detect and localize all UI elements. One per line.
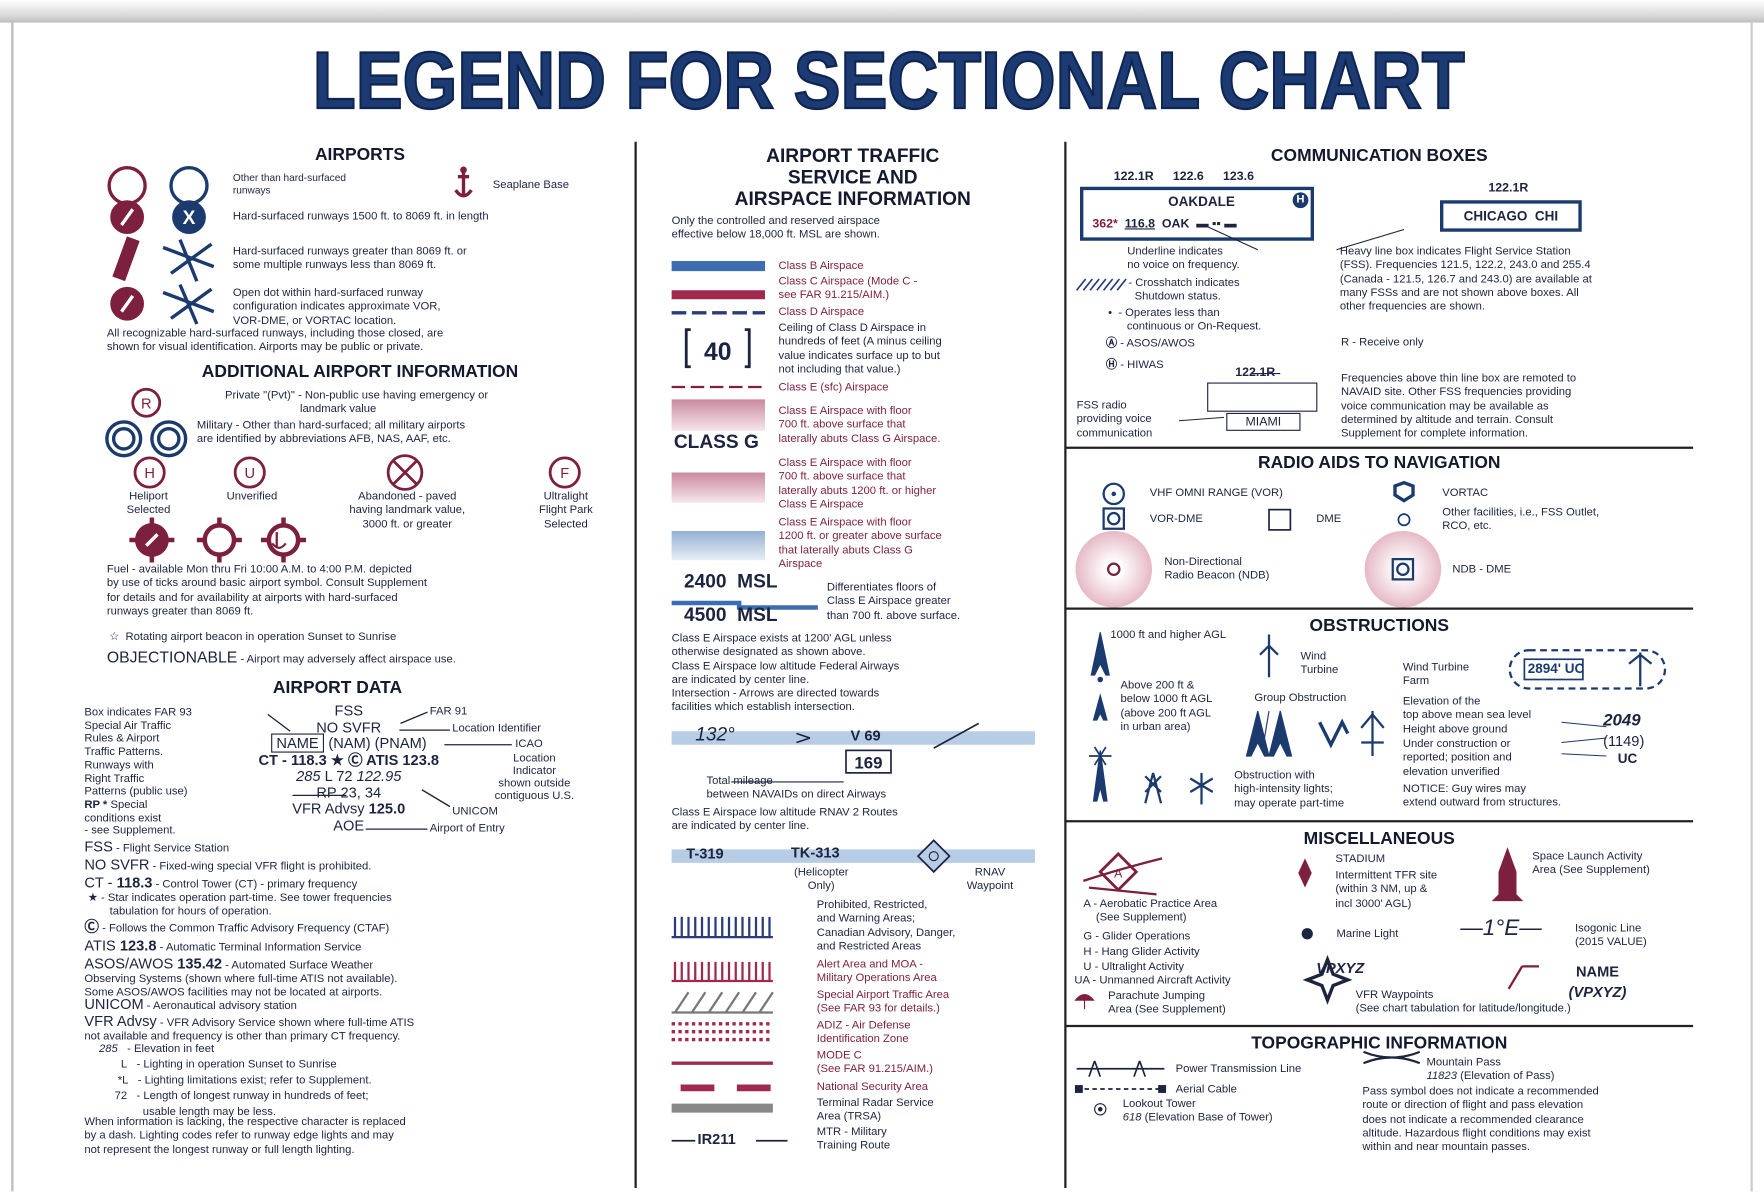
panel: miscellaneous: incl 3000' AGL)	[1335, 897, 1411, 910]
panel: airports: Heliport	[129, 490, 168, 503]
panel: airport traffic service and airspace information: Ceiling of Class D Airspace in	[778, 322, 926, 334]
panel: airport traffic service and airspace information: value indicates surface up to but	[778, 349, 940, 362]
panel: airports: All recognizable hard-surfaced runways, including those closed, are	[107, 327, 443, 340]
panel: airports: runways greater than 8069 ft.	[107, 605, 253, 618]
panel: obstructions: in urban area)	[1120, 721, 1191, 733]
panel: airport data: Location Identifier	[452, 722, 541, 735]
panel: airport traffic service and airspace information: Class E Airspace with floor	[778, 457, 912, 469]
panel: miscellaneous: (VPXYZ)	[1569, 983, 1626, 1000]
panel: communication boxes: many FSSs and are not shown above boxes. All	[1340, 287, 1579, 299]
panel: communication boxes: - Crosshatch indicates	[1128, 277, 1240, 289]
panel: airport traffic service and airspace information	[672, 145, 1035, 1152]
heading: miscellaneous: MISCELLANEOUS	[1304, 829, 1455, 848]
panel: miscellaneous: Isogonic Line	[1575, 922, 1641, 935]
comm box: oakdale	[1080, 187, 1314, 241]
panel: airport data: 72 - Length of longest runway in hundreds of feet;	[115, 1090, 369, 1102]
airport data definitions: FSS - Flight Service Station	[84, 838, 229, 855]
panel: communication boxes: Shutdown status.	[1135, 291, 1221, 303]
panel: airport data: not available and frequency is other than primary CT frequency.	[84, 1030, 400, 1043]
panel: airport traffic service and airspace information: 700 ft. above surface that	[778, 419, 905, 431]
panel: topographic information: Pass symbol does not indicate a recommended	[1362, 1086, 1599, 1098]
panel: airport traffic service and airspace information: (See FAR 93 for details.)	[817, 1003, 940, 1015]
panel: airport traffic service and airspace information: Total mileage	[706, 775, 773, 788]
panel: airport traffic service and airspace information: Class E Airspace with floor	[778, 405, 912, 417]
panel: airport data: Location	[513, 753, 556, 765]
panel: airport data: UNICOM	[452, 806, 498, 818]
panel: airport data: *L - Lighting limitations exist; refer to Supplement.	[118, 1074, 372, 1087]
panel: airport traffic service and airspace information: laterally abuts Class G Airspace.	[778, 433, 940, 445]
airspace symbols	[672, 261, 1035, 1142]
panel: communication boxes: 122.1R 122.6 123.6	[1114, 170, 1254, 183]
panel: airports: Hard-surfaced runways 1500 ft. to 8069 ft. in length	[233, 210, 489, 223]
panel: airports: Private "(Pvt)" - Non-public use having emergency or	[225, 389, 488, 402]
panel: communication boxes: 122.1R	[1488, 181, 1528, 195]
panel: airport data: not represent the longest runway or full length lighting.	[84, 1144, 355, 1156]
heading: airports: AIRPORTS	[315, 145, 405, 164]
panel: obstructions: Turbine	[1300, 664, 1338, 676]
panel: airport traffic service and airspace information: Waypoint	[967, 880, 1013, 892]
panel: airport traffic service and airspace information: Terminal Radar Service	[817, 1097, 934, 1109]
panel: airport data: FAR 91	[430, 705, 467, 718]
panel: airport traffic service and airspace information: Only the controlled and reserved airspace	[672, 215, 880, 227]
airport data definitions	[84, 838, 371, 891]
panel: airport data: L - Lighting in operation Sunset to Sunrise	[121, 1059, 337, 1071]
panel: airport data: Patterns (public use)	[84, 785, 188, 798]
panel: miscellaneous: Area (See Supplement)	[1108, 1004, 1226, 1016]
panel: airport traffic service and airspace information: Class C Airspace (Mode C -	[778, 276, 917, 288]
panel: miscellaneous: (See chart tabulation for latitude/longitude.)	[1356, 1003, 1571, 1015]
airport data sample block	[258, 702, 439, 833]
panel: airport data: UNICOM - Aeronautical advisory station	[84, 996, 297, 1012]
panel: topographic information: Power Transmission Line	[1176, 1063, 1301, 1076]
panel: topographic information: Mountain Pass	[1426, 1056, 1501, 1069]
panel: airport traffic service and airspace information: 2400 MSL	[684, 570, 778, 592]
panel: miscellaneous: (See Supplement)	[1096, 912, 1187, 924]
panel: airports: Fuel - available Mon thru Fri 10:00 A.M. to 4:00 P.M. depicted	[107, 564, 412, 576]
panel: airport traffic service and airspace information: Class E Airspace	[778, 498, 864, 511]
panel: communication boxes: 122.1R	[1235, 366, 1275, 379]
panel: topographic information: route or direction of flight and pass elevation	[1362, 1099, 1583, 1112]
panel: miscellaneous: Intermittent TFR site	[1335, 870, 1437, 882]
panel: airport data: Some ASOS/AWOS facilities may not be located at airports.	[84, 987, 382, 999]
panel: airport data: Rules & Airport	[84, 733, 159, 745]
panel: airport data: - see Supplement.	[84, 825, 176, 837]
panel: airport traffic service and airspace information: Class B Airspace	[778, 260, 864, 272]
panel: miscellaneous: Area (See Supplement)	[1532, 864, 1650, 877]
panel: topographic information: altitude. Hazardous flight conditions may exist	[1362, 1127, 1591, 1140]
panel: obstructions: elevation unverified	[1403, 766, 1500, 778]
panel: airports: OBJECTIONABLE - Airport may adversely affect airspace use.	[107, 648, 456, 666]
panel: airport traffic service and airspace information: Canadian Advisory, Danger,	[817, 927, 955, 939]
panel: airport traffic service and airspace information: (Helicopter	[794, 866, 848, 879]
airport symbol descriptions: Other than hard-surfaced	[233, 172, 346, 183]
panel: airports: Military - Other than hard-surfaced; all military airports	[197, 420, 465, 432]
obstruction icons	[1089, 632, 1666, 804]
panel: communication boxes: NAVAID site. Other FSS frequencies providing	[1341, 386, 1571, 399]
panel: airport data: conditions exist	[84, 812, 161, 824]
airport symbols	[105, 166, 581, 562]
airspace symbols: 169	[854, 753, 883, 772]
panel: miscellaneous: VFR Waypoints	[1356, 989, 1433, 1001]
panel: airport traffic service and airspace information: RNAV	[975, 866, 1005, 879]
panel: miscellaneous: G - Glider Operations	[1083, 930, 1190, 943]
panel: communication boxes: communication	[1077, 427, 1152, 439]
panel: airport traffic service and airspace information: see FAR 91.215/AIM.)	[778, 289, 889, 302]
panel: airport data: contiguous U.S.	[495, 790, 574, 802]
panel: airport traffic service and airspace information: otherwise designated as shown above.	[672, 646, 866, 658]
airport data sample block: NO SVFR	[316, 718, 381, 735]
heading: airspace: AIRSPACE INFORMATION	[735, 188, 971, 209]
airport data definitions: NO SVFR - Fixed-wing special VFR flight is prohibited.	[84, 856, 371, 873]
panel: miscellaneous: Parachute Jumping	[1108, 990, 1205, 1002]
panel: obstructions: Farm	[1403, 675, 1429, 688]
airport symbols: R	[141, 396, 152, 412]
airport symbols: U	[244, 466, 255, 482]
airport data sample block: NAME (NAM) (PNAM)	[276, 735, 427, 752]
panel: radio aids to navigation: DME	[1316, 513, 1341, 525]
panel: airports: Open dot within hard-surfaced runway	[233, 287, 423, 299]
panel: radio aids to navigation: RCO, etc.	[1442, 520, 1492, 532]
panel: airport traffic service and airspace information: Prohibited, Restricted,	[817, 899, 927, 911]
panel: airport traffic service and airspace information: T-319	[686, 845, 724, 862]
panel: miscellaneous: H - Hang Glider Activity	[1083, 946, 1200, 958]
comm box: oakdale: H	[1296, 194, 1305, 206]
heading: airspace: SERVICE AND	[788, 166, 918, 188]
panel: communication boxes: other frequencies are shown.	[1340, 301, 1485, 313]
panel: miscellaneous: Marine Light	[1336, 928, 1398, 940]
panel: airport data: ATIS 123.8 - Automatic Terminal Information Service	[84, 937, 361, 954]
panel: airport traffic service and airspace information: Airspace	[778, 558, 822, 570]
heading: radio aids: RADIO AIDS TO NAVIGATION	[1258, 453, 1501, 472]
airway labels: 132°	[695, 723, 735, 745]
panel: airport traffic service and airspace information: than 700 ft. above surface.	[827, 609, 960, 622]
panel: miscellaneous: U - Ultralight Activity	[1083, 961, 1184, 973]
airport symbols: X	[183, 208, 196, 229]
panel: obstructions: (above 200 ft AGL	[1120, 707, 1211, 720]
panel: miscellaneous: UA - Unmanned Aircraft Activity	[1074, 974, 1231, 987]
panel: airport traffic service and airspace information: ADIZ - Air Defense	[817, 1019, 911, 1032]
comm box: oakdale: OAKDALE	[1168, 194, 1235, 209]
panel: airports: Ultralight	[544, 490, 588, 503]
panel: obstructions: Height above ground	[1403, 723, 1507, 736]
panel: airport data: tabulation for hours of operation.	[110, 906, 272, 918]
panel: communication boxes: FSS radio	[1077, 399, 1127, 412]
panel: airport data: Indicator	[513, 765, 556, 777]
panel: airports: VOR-DME, or VORTAC location.	[233, 315, 396, 327]
panel: airports: Unverified	[227, 490, 277, 503]
panel: airport traffic service and airspace information: Intersection - Arrows are directed towards	[672, 688, 879, 700]
panel: communication boxes: R - Receive only	[1341, 336, 1424, 349]
panel: obstructions: Above 200 ft &	[1120, 680, 1194, 692]
panel: communication boxes: Frequencies above thin line box are remoted to	[1341, 372, 1576, 385]
panel: airport traffic service and airspace information: Identification Zone	[817, 1033, 909, 1045]
panel: airports: are identified by abbreviations AFB, NAS, AAF, etc.	[197, 433, 451, 446]
panel: communication boxes: no voice on frequency.	[1127, 259, 1240, 271]
panel: airports: ☆ Rotating airport beacon in operation Sunset to Sunrise	[109, 631, 396, 644]
panel: airport data: Traffic Patterns.	[84, 746, 163, 758]
panel: communication boxes: (FSS). Frequencies 121.5, 122.2, 243.0 and 255.4	[1340, 259, 1591, 271]
panel: airport data: ★ - Star indicates operation part-time. See tower frequencies	[88, 892, 392, 904]
title: LEGEND FOR SECTIONAL CHART	[313, 36, 1465, 126]
panel: communication boxes: Heavy line box indicates Flight Service Station	[1340, 245, 1571, 258]
panel: airport traffic service and airspace information: V 69	[850, 727, 881, 744]
panel: airport data: Observing Systems (shown where full-time ATIS not available).	[84, 973, 397, 986]
airport data sample block: FSS	[335, 702, 363, 719]
airport symbol descriptions: runways	[233, 184, 271, 196]
panel: communication boxes: MIAMI	[1245, 415, 1281, 429]
panel: topographic information: Aerial Cable	[1176, 1083, 1237, 1096]
panel: airport traffic service and airspace information: Differentiates floors of	[827, 582, 936, 594]
panel: miscellaneous: NAME	[1576, 963, 1619, 980]
panel: airport traffic service and airspace information: Class D Airspace	[778, 306, 864, 318]
panel: topographic information: 618 (Elevation Base of Tower)	[1123, 1112, 1273, 1124]
panel: miscellaneous: VPXYZ	[1316, 960, 1364, 976]
panel: airports: for details and for availability at airports with hard-surfaced	[107, 591, 398, 604]
panel: airports: shown for visual identification. Airports may be public or private.	[107, 341, 423, 354]
heading: airspace	[735, 145, 971, 209]
panel: topographic information: does not indicate a recommended clearance	[1362, 1113, 1584, 1126]
topo icons	[1074, 1050, 1420, 1116]
panel: airport traffic service and airspace information: are indicated by center line.	[672, 674, 809, 686]
panel: airports	[105, 145, 593, 666]
airport symbols: H	[144, 466, 155, 482]
panel: obstructions: 2894' UC	[1528, 660, 1584, 676]
comm box: chicago: CHICAGO CHI	[1464, 208, 1558, 224]
panel: obstructions: below 1000 ft AGL	[1120, 693, 1212, 706]
panel: communication boxes: Ⓐ - ASOS/AWOS	[1106, 338, 1195, 350]
panel: obstructions: high-intensity lights;	[1234, 783, 1333, 796]
panel: airport traffic service and airspace information: Special Airport Traffic Area	[817, 989, 949, 1001]
panel: obstructions: (1149)	[1603, 732, 1644, 749]
panel: miscellaneous	[1074, 829, 1650, 1016]
panel: radio aids to navigation: Other facilities, i.e., FSS Outlet,	[1442, 506, 1599, 519]
panel: communication boxes: voice communication may be available as	[1341, 400, 1549, 412]
panel: airport data: Special Air Traffic	[84, 720, 171, 732]
panel: airport traffic service and airspace information: MTR - Military	[817, 1126, 887, 1138]
panel: airport traffic service and airspace information: 4500 MSL	[684, 604, 778, 626]
panel: airport traffic service and airspace information: between NAVAIDs on direct Airways	[706, 789, 886, 801]
comm box: miami	[1207, 382, 1317, 412]
panel: airport data: Runways with	[84, 759, 154, 772]
panel: airport data: ICAO	[515, 738, 543, 750]
panel: airports: 3000 ft. or greater	[363, 518, 452, 531]
panel: airport data: shown outside	[498, 777, 570, 790]
panel: obstructions: NOTICE: Guy wires may	[1403, 783, 1526, 795]
panel: topographic information	[1074, 1034, 1599, 1153]
airport data sample block: CT - 118.3 ★ Ⓒ ATIS 123.8	[258, 751, 439, 768]
comm box: chicago	[1440, 200, 1582, 232]
panel: airport traffic service and airspace information: that laterally abuts Class G	[778, 544, 913, 556]
panel: miscellaneous: (2015 VALUE)	[1575, 936, 1647, 949]
panel: airport traffic service and airspace information: Class E (sfc) Airspace	[778, 381, 889, 394]
panel: topographic information: 11823 (Elevation of Pass)	[1426, 1070, 1555, 1083]
airport data definitions: CT - 118.3 - Control Tower (CT) - primary frequency	[84, 874, 357, 891]
panel: airport data: Right Traffic	[84, 772, 144, 785]
panel: airport data: Airport of Entry	[430, 822, 505, 835]
panel: airport traffic service and airspace information: 1200 ft. or greater above surface	[778, 530, 942, 543]
heading: obstructions: OBSTRUCTIONS	[1310, 616, 1449, 636]
panel: airport traffic service and airspace information: laterally abuts 1200 ft. or higher	[778, 484, 936, 497]
panel: miscellaneous: Space Launch Activity	[1532, 850, 1642, 863]
panel: obstructions: Elevation of the	[1403, 695, 1480, 708]
panel: airport traffic service and airspace information: Area (TRSA)	[817, 1111, 881, 1123]
panel: airport data: VFR Advsy - VFR Advisory Service shown where full-time ATIS	[84, 1012, 414, 1029]
panel: airport traffic service and airspace information: Class E Airspace with floor	[778, 516, 912, 529]
panel: obstructions: 2049	[1603, 711, 1641, 730]
misc icons: A	[1114, 866, 1123, 880]
panel: topographic information: within and near mountain passes.	[1362, 1141, 1530, 1153]
panel: communication boxes: Ⓗ - HIWAS	[1106, 359, 1164, 371]
heading: airspace: AIRPORT TRAFFIC	[766, 145, 939, 166]
panel: airports: some multiple runways less than 8069 ft.	[233, 259, 436, 271]
panel: miscellaneous: A - Aerobatic Practice Area	[1083, 898, 1217, 910]
panel: airport data: Ⓒ - Follows the Common Traffic Advisory Frequency (CTAF)	[84, 918, 389, 935]
panel: obstructions: extend outward from structures.	[1403, 797, 1561, 809]
panel: obstructions: may operate part-time	[1234, 797, 1344, 810]
panel: airport traffic service and airspace information: Class E Airspace exists at 1200' AGL unless	[672, 632, 892, 645]
panel: airport data: When information is lacking, the respective character is replaced	[84, 1116, 406, 1128]
panel: obstructions: Wind Turbine	[1403, 662, 1469, 674]
panel: airport traffic service and airspace information: (See FAR 91.215/AIM.)	[817, 1063, 933, 1076]
airport data sample block: AOE	[333, 816, 364, 833]
panel: obstructions	[1089, 616, 1666, 810]
page frame	[0, 0, 1764, 22]
airport data sample block: VFR Advsy 125.0	[292, 800, 405, 817]
panel: airport traffic service and airspace information: Military Operations Area	[817, 972, 937, 985]
panel: airports: Selected	[127, 504, 170, 517]
panel: airport traffic service and airspace information: effective below 18,000 ft. MSL are shown.	[672, 229, 880, 241]
panel: radio aids to navigation: VOR-DME	[1150, 513, 1203, 525]
panel: airports: Flight Park	[539, 504, 593, 517]
panel: airport traffic service and airspace information: TK-313	[791, 844, 840, 861]
heading: airport data: AIRPORT DATA	[273, 678, 402, 698]
panel: airports: having landmark value,	[349, 504, 465, 517]
panel: radio aids to navigation: Radio Beacon (NDB)	[1164, 570, 1269, 582]
panel: airport data	[84, 678, 574, 1156]
panel: airport traffic service and airspace information: hundreds of feet (A minus ceiling	[778, 336, 942, 348]
panel: radio aids to navigation: VHF OMNI RANGE (VOR)	[1150, 487, 1283, 500]
comm box: oakdale: 362* 116.8 OAK ▬ ▪▪ ▬	[1092, 217, 1237, 231]
panel: communication boxes: providing voice	[1077, 413, 1152, 426]
panel: miscellaneous: STADIUM	[1335, 853, 1385, 865]
panel: obstructions: 1000 ft and higher AGL	[1110, 629, 1226, 641]
airport symbols: F	[560, 466, 569, 482]
airport symbol descriptions	[233, 172, 346, 196]
panel: airport traffic service and airspace information: Training Route	[817, 1140, 890, 1152]
airspace symbols: 40	[704, 339, 732, 366]
panel: topographic information: Lookout Tower	[1123, 1098, 1196, 1110]
panel: radio aids to navigation: Non-Directional	[1164, 556, 1242, 568]
panel: airport data: by a dash. Lighting codes refer to runway edge lights and may	[84, 1130, 394, 1142]
panel: airport traffic service and airspace information: facilities which establish intersection.	[672, 701, 855, 714]
panel: communication boxes: (Canada - 121.5, 126.7 and 243.0) are available at	[1340, 273, 1592, 285]
navaid icons	[1076, 480, 1442, 608]
panel: miscellaneous: —1°E—	[1460, 916, 1542, 940]
heading: communication boxes: COMMUNICATION BOXES	[1271, 146, 1488, 165]
airport data sample block: 285 L 72 122.95	[296, 767, 401, 784]
panel: airport traffic service and airspace information: IR211	[698, 1131, 736, 1148]
panel: communication boxes	[1076, 146, 1592, 440]
panel: airports: by use of ticks around basic airport symbol. Consult Supplement	[107, 577, 427, 590]
panel: airport traffic service and airspace information: 700 ft. above surface that	[778, 471, 905, 483]
panel: airport traffic service and airspace information: Class E Airspace low altitude Federal Airways	[672, 660, 899, 672]
panel: airport traffic service and airspace information: are indicated by center line.	[672, 820, 809, 833]
panel: airport traffic service and airspace information: Class E Airspace low altitude RNAV 2 Routes	[672, 807, 898, 819]
panel: obstructions: top above mean sea level	[1403, 709, 1531, 721]
panel: radio aids to navigation	[1076, 453, 1599, 608]
panel: airport traffic service and airspace information: Only)	[808, 880, 835, 892]
panel: airport traffic service and airspace information: and Warning Areas;	[817, 913, 915, 925]
panel: airport traffic service and airspace information: Class E Airspace greater	[827, 595, 951, 608]
panel: airports: Hard-surfaced runways greater than 8069 ft. or	[233, 245, 467, 258]
panel: obstructions: reported; position and	[1403, 752, 1512, 764]
panel: airport traffic service and airspace information: Alert Area and MOA -	[817, 958, 923, 971]
panel: airport data: RP * Special	[84, 799, 147, 811]
panel: obstructions: Under construction or	[1403, 738, 1510, 750]
panel: communication boxes: determined by altitude and terrain. Consult	[1341, 414, 1553, 426]
panel: airports: configuration indicates approximate VOR,	[233, 301, 440, 313]
heading: topographic: TOPOGRAPHIC INFORMATION	[1251, 1034, 1507, 1053]
panel: airport traffic service and airspace information: not including that value.)	[778, 363, 900, 376]
panel: airports: Selected	[544, 518, 588, 531]
panel: airport traffic service and airspace information: CLASS G	[674, 431, 759, 452]
panel: airports: landmark value	[300, 403, 376, 415]
panel: airports: Abandoned - paved	[358, 490, 456, 503]
panel: communication boxes: • - Operates less than	[1108, 307, 1220, 320]
panel: airport traffic service and airspace information: National Security Area	[817, 1081, 928, 1094]
panel: obstructions: Obstruction with	[1234, 770, 1315, 782]
panel: communication boxes: Supplement for complete information.	[1341, 428, 1528, 440]
panel: obstructions: Wind	[1300, 650, 1326, 663]
airport data sample block: RP 23, 34	[316, 784, 381, 800]
panel: communication boxes: Underline indicates	[1127, 245, 1223, 258]
panel: obstructions: Group Obstruction	[1254, 692, 1346, 704]
panel: airport data: 285 - Elevation in feet	[99, 1043, 214, 1055]
panel: airports: Seaplane Base	[493, 179, 569, 191]
panel: miscellaneous: (within 3 NM, up &	[1335, 883, 1427, 896]
panel: airport data: ASOS/AWOS 135.42 - Automated Surface Weather	[84, 955, 373, 972]
panel: obstructions: UC	[1618, 750, 1637, 766]
panel: airport traffic service and airspace information: and Restricted Areas	[817, 940, 921, 953]
misc icons	[1074, 847, 1539, 1010]
panel: airport data: usable length may be less.	[143, 1106, 276, 1118]
panel: airport traffic service and airspace information: MODE C	[817, 1050, 862, 1062]
panel: radio aids to navigation: VORTAC	[1442, 487, 1488, 500]
heading: additional airport information: ADDITIONAL AIRPORT INFORMATION	[202, 362, 518, 381]
panel: radio aids to navigation: NDB - DME	[1452, 564, 1511, 576]
panel: communication boxes: continuous or On-Request.	[1127, 321, 1261, 333]
panel: airport data: Box indicates FAR 93	[84, 706, 192, 719]
